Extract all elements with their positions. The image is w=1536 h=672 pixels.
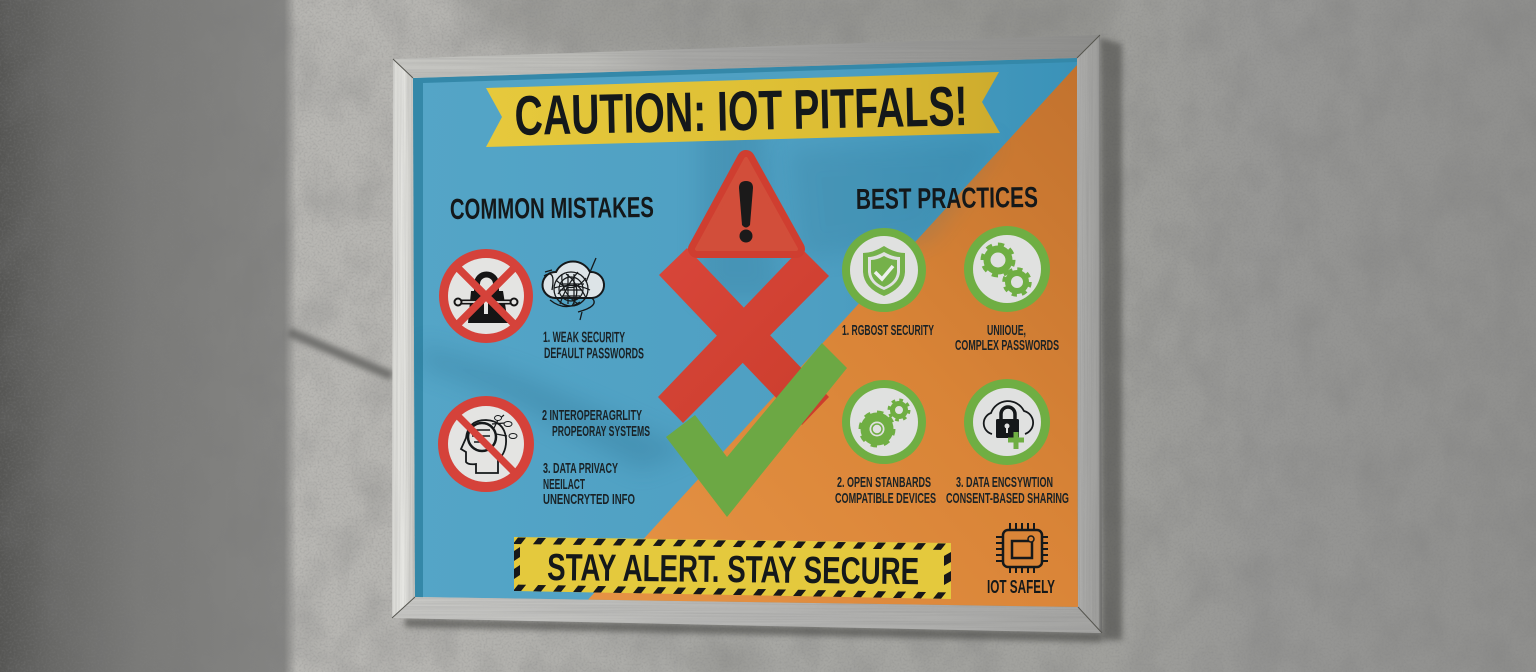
practice 4: cloud lock icon [964, 379, 1050, 465]
mistake text 1 [543, 329, 644, 362]
caution tape slogan: STAY ALERT. STAY SECURE [547, 547, 919, 593]
poster background [413, 58, 1078, 610]
heading: best practices: BEST PRACTICES [856, 182, 1038, 216]
practice 2 label: COMPLEX PASSWORDS [955, 337, 1059, 354]
caution tape slogan [513, 537, 951, 599]
poster with frame [385, 30, 1110, 640]
practice 3: open standards gears icon [842, 380, 926, 464]
practice 3 label: 2. OPEN STANBARDS [837, 474, 931, 491]
practice 3 label [835, 474, 936, 507]
icon: microchip [996, 523, 1048, 573]
mistake text 3: UNENCRYTED INFO [543, 491, 635, 508]
practice 2 label: UNIIOUE, [987, 322, 1026, 339]
mistake text 1: 1. WEAK SECURITY [543, 329, 625, 346]
big red X [658, 248, 829, 425]
mistake text 1: DEFAULT PASSWORDS [544, 345, 644, 362]
mistake text 3: NEEILACT [543, 476, 585, 493]
mistake text 2 [542, 407, 650, 440]
heading: common mistakes: COMMON MISTAKES [450, 192, 654, 226]
warning triangle [697, 159, 796, 249]
central symbols [658, 159, 847, 517]
practice 3 label: COMPATIBLE DEVICES [835, 490, 936, 507]
mistake text 3: 3. DATA PRIVACY [543, 460, 618, 477]
practice 1: shield icon [842, 228, 926, 312]
green check mark [666, 343, 847, 517]
mistake 1: no-lock icon [439, 249, 533, 343]
practice 2 label [955, 322, 1059, 354]
IoT safely label: IOT SAFELY [987, 577, 1055, 597]
mistake text 2: PROPEORAY SYSTEMS [552, 423, 650, 440]
mistake 2: no-brain head icon [438, 396, 534, 492]
practice 2: gears icon [964, 226, 1050, 312]
mistake text 2: 2 INTEROPERAGRLITY [542, 407, 642, 424]
practice 1 label: 1. RGBOST SECURITY [842, 322, 934, 339]
frame drop shadow [405, 38, 1122, 642]
practice 4 label: 3. DATA ENCSYWTION [956, 474, 1053, 491]
title banner: CAUTION: IOT PITFALS! [514, 74, 968, 147]
tangled cloud icon [543, 258, 604, 320]
practice 4 label [946, 474, 1069, 507]
mistake text 3 [543, 460, 635, 508]
metal frame [385, 30, 1110, 640]
practice 4 label: CONSENT-BASED SHARING [946, 490, 1069, 507]
